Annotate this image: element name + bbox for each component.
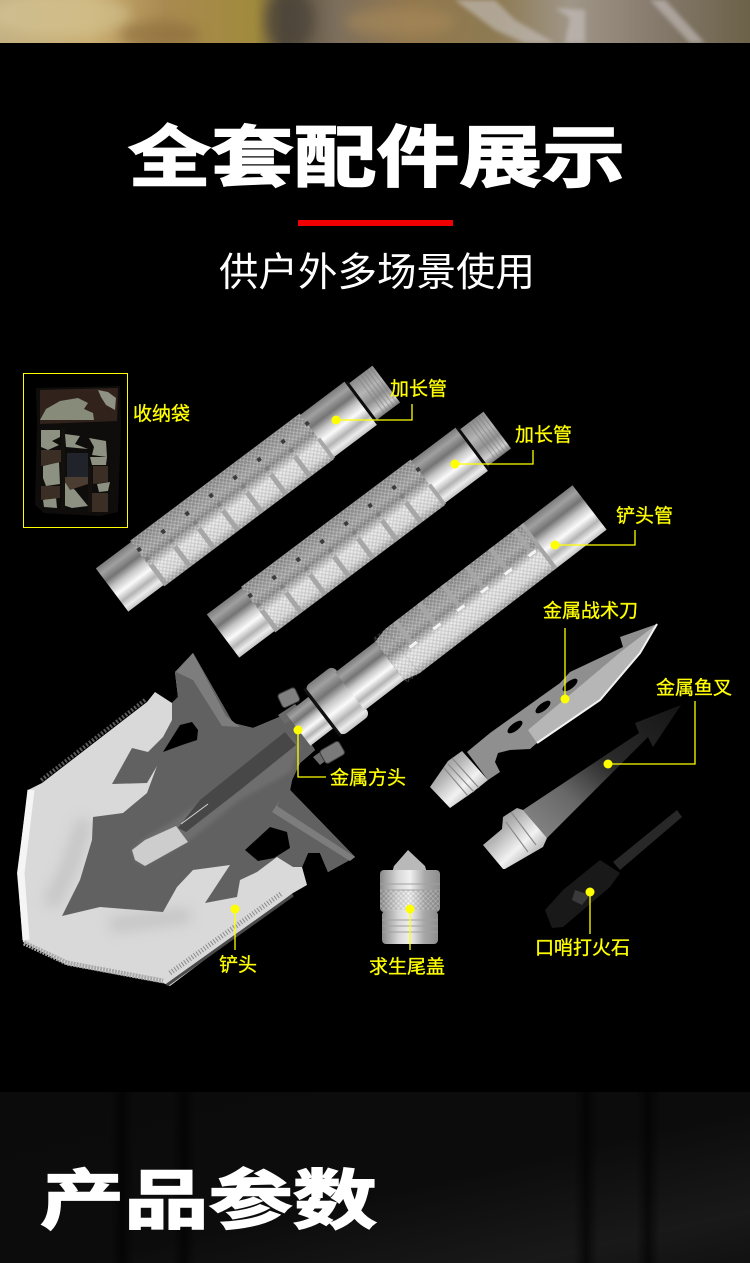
accessory: metal fish spear bbox=[483, 705, 681, 869]
accessory: shovel head tube bbox=[303, 483, 608, 738]
accessory: survival end cap bbox=[380, 850, 440, 944]
accessory: extension tube 2 bbox=[206, 407, 514, 659]
callout: 求生尾盖 bbox=[369, 904, 445, 978]
callout: 口哨打火石 bbox=[535, 888, 630, 959]
callout: 加长管 2 bbox=[450, 424, 572, 468]
callout: 金属战术刀: 金属战术刀 bbox=[543, 600, 638, 622]
callout: 加长管 1: 加长管 bbox=[390, 378, 447, 400]
callout: 金属鱼叉: 金属鱼叉 bbox=[656, 677, 732, 699]
label: 收纳袋: 收纳袋 bbox=[133, 403, 190, 425]
callout: 铲头管: 铲头管 bbox=[616, 505, 673, 527]
lower section background bbox=[0, 1092, 750, 1263]
accessory: metal tactical knife bbox=[430, 624, 657, 808]
subtitle: 供户外多场景使用 bbox=[219, 251, 535, 295]
callout: 金属战术刀 bbox=[543, 600, 638, 704]
callout: 金属鱼叉 bbox=[604, 677, 732, 768]
accessory: shovel head bbox=[17, 653, 355, 986]
accessory: whistle flint bbox=[545, 810, 682, 928]
title: 全套配件展示: 全套配件展示 bbox=[128, 121, 625, 196]
callout: 口哨打火石: 口哨打火石 bbox=[535, 937, 630, 959]
callout: 求生尾盖: 求生尾盖 bbox=[369, 956, 445, 978]
callout: 加长管 2: 加长管 bbox=[515, 424, 572, 446]
accessory: extension tube 1 bbox=[95, 361, 403, 613]
callout: 金属方头 bbox=[294, 726, 406, 789]
red divider bar bbox=[298, 220, 453, 226]
callout: 铲头 bbox=[219, 904, 257, 976]
callout: 铲头管 bbox=[550, 505, 673, 550]
callout: 金属方头: 金属方头 bbox=[330, 767, 406, 789]
heading: 产品参数: 产品参数 bbox=[40, 1164, 377, 1237]
panel: storage pouch bbox=[24, 374, 128, 528]
callout: 铲头: 铲头 bbox=[219, 954, 257, 976]
top photo strip bbox=[0, 0, 750, 43]
accessory: metal square head with bolts bbox=[277, 687, 346, 765]
callout: 加长管 1 bbox=[332, 378, 447, 424]
